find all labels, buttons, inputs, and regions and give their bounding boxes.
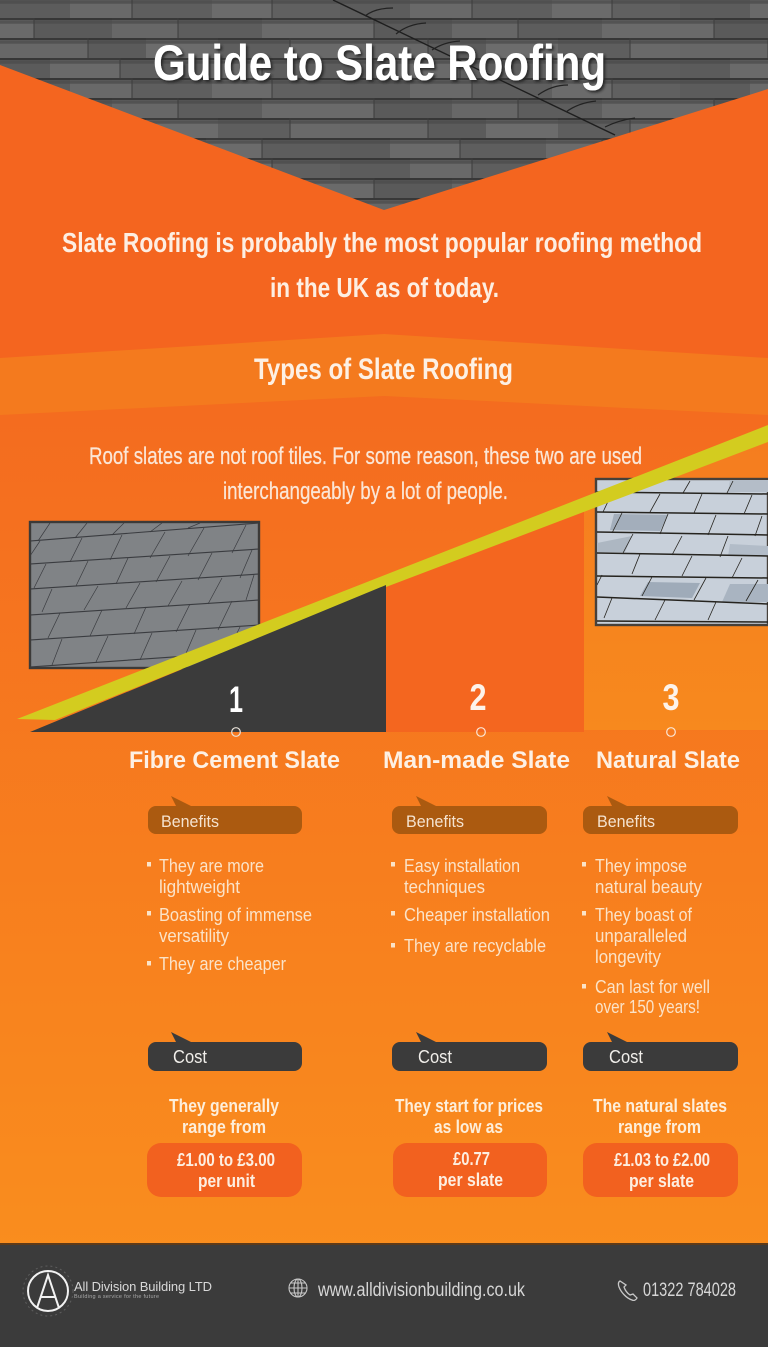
- benefits label: Benefits: [406, 812, 464, 831]
- orange chevron panel: [0, 65, 768, 360]
- benefits list: [582, 856, 710, 1017]
- banner: types of slate roofing: Types of Slate Roofing: [254, 353, 513, 386]
- heading: fibre cement slate: Fibre Cement Slate: [129, 747, 340, 774]
- price box: per unit: [198, 1171, 255, 1191]
- number 2: 2: [470, 677, 486, 718]
- logo: Building a service for the future: [74, 1294, 159, 1300]
- benefits list: They are recyclable: [404, 936, 546, 956]
- column 3 backdrop: [584, 442, 768, 730]
- benefits list: over 150 years!: [595, 997, 700, 1017]
- cost text: They generally: [169, 1096, 279, 1116]
- footer: [0, 1243, 768, 1347]
- cost text: as low as: [434, 1117, 503, 1137]
- cost text: The natural slates: [593, 1096, 727, 1116]
- cost text: range from: [182, 1117, 266, 1137]
- number 1: 1: [229, 679, 243, 720]
- cost text: [169, 1096, 279, 1137]
- cost text: They start for prices: [395, 1096, 543, 1116]
- benefits list: versatility: [159, 926, 229, 946]
- header roof photo: [0, 0, 768, 212]
- cost text: range from: [618, 1117, 701, 1137]
- cost label: Cost: [173, 1047, 207, 1067]
- description text: interchangeably by a lot of people.: [223, 478, 508, 505]
- logo: [23, 1266, 212, 1316]
- cost label: [392, 1032, 547, 1071]
- cost text: [593, 1096, 727, 1137]
- intro text: in the UK as of today.: [270, 272, 499, 303]
- yellow diagonal band: [17, 425, 768, 720]
- price box: [147, 1143, 302, 1197]
- price box: per slate: [629, 1171, 694, 1191]
- panel: man-made slate: [391, 796, 550, 1197]
- benefits list: They boast of: [595, 905, 693, 925]
- benefits list: [147, 856, 312, 974]
- price box: per slate: [438, 1170, 503, 1190]
- phone number: 01322 784028: [643, 1280, 736, 1301]
- benefits list: They impose: [595, 856, 687, 876]
- benefits list: Easy installation: [404, 856, 520, 876]
- intro text: [62, 227, 702, 303]
- number 3: [662, 677, 680, 736]
- benefits list: techniques: [404, 877, 485, 897]
- price box: [393, 1143, 547, 1197]
- benefits label: Benefits: [161, 812, 219, 831]
- cost label: Cost: [418, 1047, 452, 1067]
- benefits label: Benefits: [597, 812, 655, 831]
- panel: fibre cement slate: [147, 796, 312, 1197]
- benefits list: [391, 856, 550, 956]
- benefits list: Can last for well: [595, 977, 710, 997]
- benefits list: They are cheaper: [159, 954, 286, 974]
- website: www.alldivisionbuilding.co.uk: [317, 1280, 525, 1301]
- benefits label: [148, 796, 302, 834]
- benefits list: unparalleled: [595, 926, 687, 946]
- price box: £0.77: [453, 1149, 490, 1169]
- banner: types of slate roofing: [0, 334, 768, 415]
- image: fibre cement slate: [30, 522, 259, 668]
- logo: All Division Building LTD: [74, 1279, 212, 1294]
- title: Guide to Slate Roofing: [153, 35, 606, 91]
- column 2 backdrop: [386, 510, 584, 732]
- number 3: 3: [662, 677, 680, 718]
- price box: £1.00 to £3.00: [177, 1150, 275, 1170]
- benefits label: [392, 796, 547, 834]
- benefits list: natural beauty: [595, 877, 702, 897]
- benefits list: lightweight: [159, 877, 240, 897]
- benefits list: longevity: [595, 947, 661, 967]
- panel: natural slate: [582, 796, 738, 1197]
- heading: natural slate: Natural Slate: [596, 747, 740, 774]
- benefits list: They are more: [159, 856, 264, 876]
- dark triangle: [30, 585, 386, 732]
- image: natural slate: [596, 479, 768, 625]
- benefits list: Cheaper installation: [404, 905, 550, 925]
- cost text: [395, 1096, 543, 1137]
- number 1: [229, 679, 243, 736]
- icon: globe: [289, 1279, 307, 1297]
- number 2: [470, 677, 486, 736]
- price box: £1.03 to £2.00: [614, 1150, 710, 1170]
- cost label: Cost: [609, 1047, 643, 1067]
- cost label: [148, 1032, 302, 1071]
- price box: [583, 1143, 738, 1197]
- benefits list: Boasting of immense: [159, 905, 312, 925]
- icon: phone: [618, 1281, 637, 1300]
- cost label: [583, 1032, 738, 1071]
- description text: [89, 443, 642, 505]
- benefits label: [583, 796, 738, 834]
- heading: man-made slate: Man-made Slate: [383, 747, 570, 774]
